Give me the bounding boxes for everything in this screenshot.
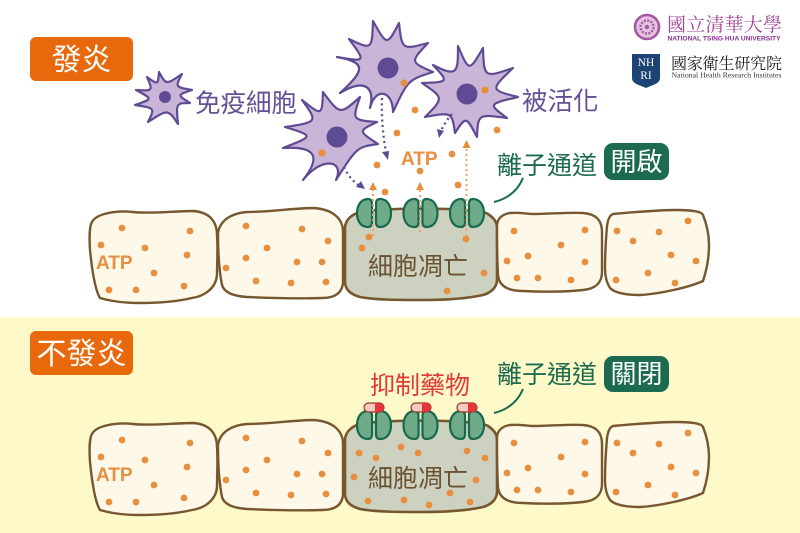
arrow: top cell down <box>382 98 389 160</box>
logo: National Tsing Hua University <box>635 14 782 42</box>
badge: inflammation <box>30 37 133 81</box>
callout line: closed channel <box>494 389 523 413</box>
ion channels: closed <box>357 411 484 439</box>
label: cell death, lower: 細胞凋亡 <box>368 465 468 493</box>
label: ATP in cell, lower: ATP <box>96 465 133 486</box>
logo: National Health Research Institutes <box>632 54 782 88</box>
row: epithelial cells, inflamed <box>90 208 709 303</box>
logo: National Tsing Hua University: NATIONAL TSING HUA UNIVERSITY <box>668 36 781 42</box>
label: ion channel, lower: 離子通道 <box>497 361 597 389</box>
badge: closed <box>604 356 669 392</box>
badge: closed: 關閉 <box>610 359 663 389</box>
label: ATP in cell: ATP <box>96 253 133 274</box>
callout line: open channel <box>494 178 523 202</box>
icons: inhibitor pills <box>364 403 477 412</box>
badge: open: 開啟 <box>610 147 663 177</box>
arrows: ATP release through channels <box>369 140 470 236</box>
logo: National Tsing Hua University: 國立清華大學 <box>667 14 782 36</box>
logo: National Health Research Institutes: NH <box>638 57 654 69</box>
label: activated: 被活化 <box>522 88 599 116</box>
ATP dots: inflamed row <box>98 218 699 294</box>
logo: National Health Research Institutes: National Health Research Institutes <box>672 70 782 80</box>
immune cell: top <box>337 21 433 112</box>
ATP dots: no inflammation row <box>98 430 699 508</box>
label: ATP released: ATP <box>401 149 438 170</box>
label: ion channel: 離子通道 <box>497 152 597 180</box>
label: cell death: 細胞凋亡 <box>368 253 468 281</box>
row: epithelial cells, no inflammation <box>90 420 709 515</box>
logo: National Health Research Institutes: 國家衛生研究院 <box>671 55 782 73</box>
logo: National Health Research Institutes: RI <box>640 70 652 82</box>
immune cell: right <box>422 46 518 137</box>
badge: inflammation: 發炎 <box>52 44 112 77</box>
label: inhibitor drug: 抑制藥物 <box>370 372 470 400</box>
arrow: right cell down <box>437 114 452 138</box>
ion channels: open <box>357 199 484 227</box>
icon: immune cell legend <box>135 72 192 124</box>
label: immune cells: 免疫細胞 <box>195 90 297 118</box>
badge: no inflammation <box>30 331 133 375</box>
badge: open <box>604 143 669 180</box>
ATP dots: released <box>374 107 500 195</box>
badge: no inflammation: 不發炎 <box>36 338 126 371</box>
background: lower panel <box>0 317 800 533</box>
immune cell: left <box>283 92 378 180</box>
arrow: immune cell to channel <box>344 167 365 189</box>
